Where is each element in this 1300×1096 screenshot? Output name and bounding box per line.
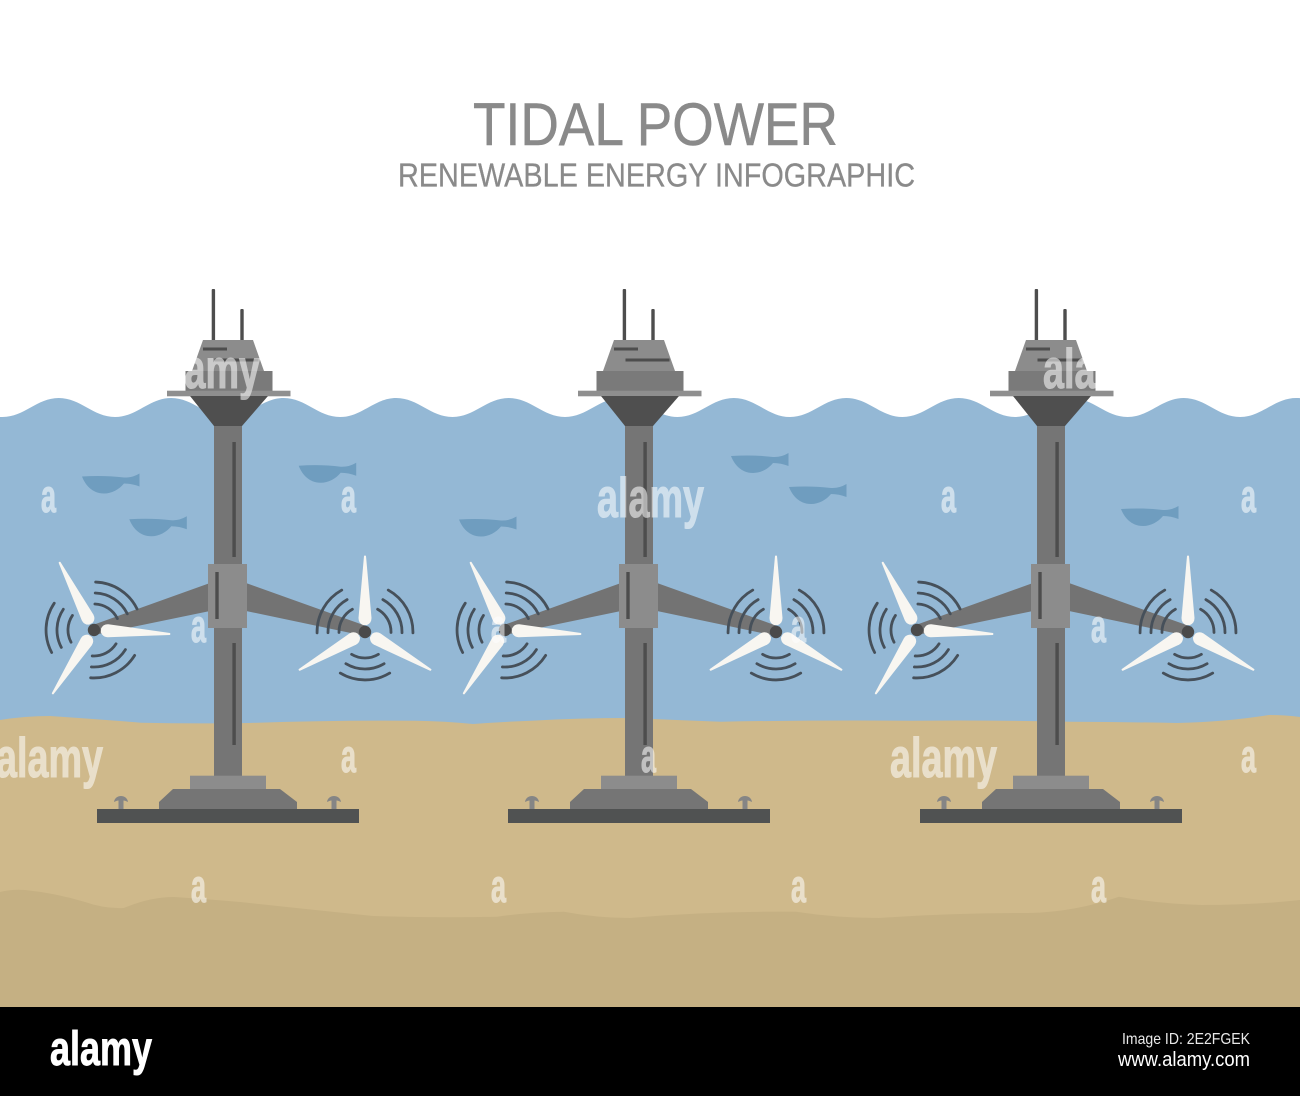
left rotor xyxy=(868,559,994,698)
right rotor xyxy=(706,556,846,680)
water xyxy=(0,398,1300,740)
right rotor xyxy=(1118,556,1258,680)
left rotor xyxy=(45,559,171,698)
watermark overlay: a xyxy=(191,860,206,912)
watermark overlay xyxy=(0,337,1256,912)
watermark overlay: alamy xyxy=(890,726,997,789)
footer logo: alamy xyxy=(50,1023,152,1076)
left rotor xyxy=(456,559,582,698)
footer bar xyxy=(0,1007,1300,1096)
turbine arms xyxy=(913,583,1192,636)
antennas xyxy=(1035,289,1067,341)
turbine arms xyxy=(90,583,369,636)
title: TIDAL POWER xyxy=(473,91,838,158)
watermark overlay: a xyxy=(1241,730,1256,782)
watermark overlay: a xyxy=(1091,860,1106,912)
seabed foundation xyxy=(508,776,770,823)
tower shaft xyxy=(214,426,242,776)
watermark overlay: a xyxy=(341,470,356,522)
control cabin xyxy=(596,340,684,391)
collar xyxy=(619,564,658,628)
watermark overlay: a xyxy=(791,600,806,652)
deep sediment layer xyxy=(0,890,1300,1007)
watermark overlay: a xyxy=(641,730,656,782)
watermark overlay: alamy xyxy=(597,466,704,529)
tidal turbine 2 xyxy=(456,289,846,823)
website: www.alamy.com xyxy=(1117,1049,1250,1071)
watermark overlay: a xyxy=(1091,600,1106,652)
watermark overlay: a xyxy=(491,600,506,652)
control cabin xyxy=(1008,340,1096,391)
antennas xyxy=(212,289,244,341)
platform deck xyxy=(578,391,702,396)
control cabin xyxy=(186,340,272,391)
tower shaft xyxy=(625,426,653,776)
tower shaft xyxy=(1037,426,1065,776)
image id: Image ID: 2E2FGEK xyxy=(1122,1031,1250,1048)
watermark overlay: a xyxy=(791,860,806,912)
collar xyxy=(208,564,247,628)
collar xyxy=(1031,564,1070,628)
watermark overlay: a xyxy=(41,470,56,522)
watermark overlay: alamy xyxy=(153,337,260,400)
fish school xyxy=(82,453,1178,536)
watermark overlay: a xyxy=(1241,470,1256,522)
watermark overlay: a xyxy=(941,470,956,522)
watermark overlay: a xyxy=(491,860,506,912)
watermark overlay: alamy xyxy=(1043,337,1150,400)
subtitle: RENEWABLE ENERGY INFOGRAPHIC xyxy=(398,156,915,194)
watermark overlay: a xyxy=(341,730,356,782)
platform deck xyxy=(990,391,1114,396)
watermark overlay: alamy xyxy=(0,726,103,789)
seabed foundation xyxy=(97,776,359,823)
funnel support xyxy=(190,396,268,426)
antennas xyxy=(623,289,655,341)
right rotor xyxy=(295,556,435,680)
tidal turbine 3 xyxy=(868,289,1258,823)
tidal turbine 1 xyxy=(45,289,435,823)
funnel support xyxy=(601,396,679,426)
sand seabed xyxy=(0,715,1300,1007)
watermark overlay: a xyxy=(191,600,206,652)
seabed foundation xyxy=(920,776,1182,823)
funnel support xyxy=(1013,396,1091,426)
turbine arms xyxy=(501,583,780,636)
platform deck xyxy=(167,391,290,396)
